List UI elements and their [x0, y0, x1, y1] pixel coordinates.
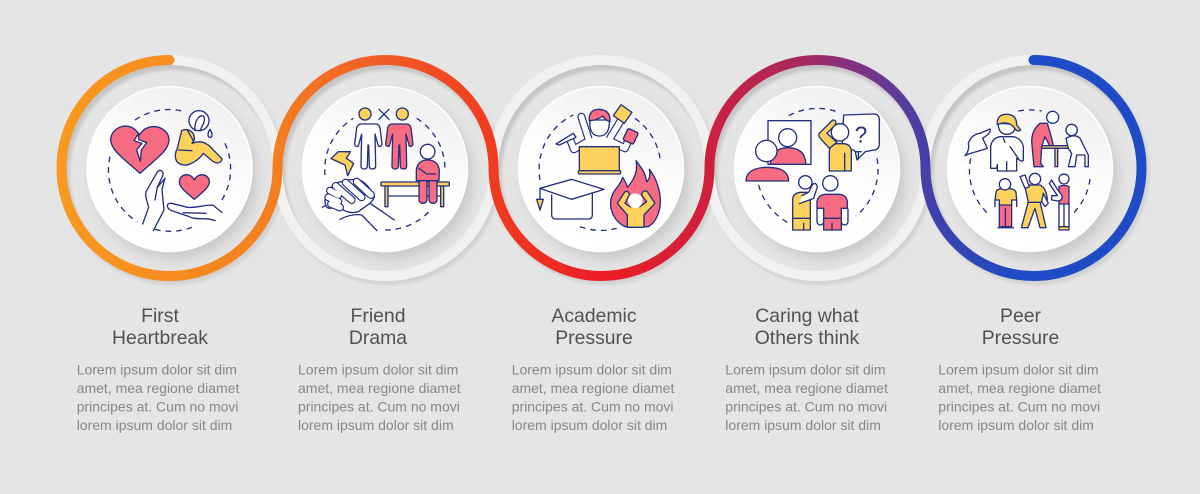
text block: first heartbreak: principes at. Cum no movi — [77, 398, 239, 414]
inner ring plates — [64, 62, 1140, 276]
text block: caring what others think: lorem ipsum dolor sit dim — [725, 417, 881, 433]
heading: First Heartbreak: First — [141, 305, 179, 327]
text block: peer pressure: lorem ipsum dolor sit dim — [938, 417, 1094, 433]
gradient ribbon linking the five rings — [61, 60, 1141, 276]
heading: Academic Pressure: Academic — [551, 305, 637, 327]
text block: caring what others think: Lorem ipsum dolor sit dim — [725, 362, 886, 378]
icon: friends apart, lonely teen, bolt, clasped hands — [322, 108, 449, 231]
text block: academic pressure: amet, mea regione diamet — [512, 380, 674, 396]
icon: broken heart, crying teen, caring hands — [108, 110, 231, 231]
text block: first heartbreak: lorem ipsum dolor sit dim — [77, 417, 232, 433]
panel: academic pressure — [518, 86, 689, 259]
text block: peer pressure: principes at. Cum no movi — [938, 398, 1100, 414]
icon: pointing hand, bullying and pressured teens — [965, 110, 1090, 230]
outer ring shadows — [60, 59, 1150, 285]
icon: multitasking student, graduation cap, flames — [537, 105, 661, 230]
heading: Academic Pressure: Pressure — [555, 327, 633, 349]
text block: peer pressure: Lorem ipsum dolor sit dim — [938, 362, 1099, 378]
heading: Caring what Others think: Others think — [755, 327, 860, 349]
text block: academic pressure: principes at. Cum no movi — [512, 398, 674, 414]
heading: Friend Drama: Friend — [351, 305, 405, 327]
text block: friend drama: lorem ipsum dolor sit dim — [298, 417, 454, 433]
heading: Peer Pressure: Peer — [1000, 305, 1042, 327]
heading: Caring what Others think: Caring what — [755, 305, 859, 327]
text block: friend drama: Lorem ipsum dolor sit dim — [298, 362, 458, 378]
text block: academic pressure: Lorem ipsum dolor sit dim — [512, 362, 672, 378]
heading: First Heartbreak: Heartbreak — [112, 327, 208, 349]
icon: mirror, question bubble, whispering friends — [746, 108, 879, 230]
panel: friend drama — [302, 86, 473, 259]
text block: friend drama: principes at. Cum no movi — [298, 398, 460, 414]
panel: first heartbreak — [87, 86, 257, 259]
text block: caring what others think: amet, mea regione diamet — [725, 380, 888, 396]
text block: peer pressure: amet, mea regione diamet — [938, 380, 1101, 396]
text block: friend drama: amet, mea regione diamet — [298, 380, 461, 396]
text block: caring what others think: principes at. Cum no movi — [725, 398, 887, 414]
text block: first heartbreak: Lorem ipsum dolor sit dim — [77, 362, 237, 378]
icon: mirror, question bubble, whispering friends: ? — [855, 121, 867, 147]
text block: first heartbreak: amet, mea regione diamet — [77, 380, 239, 396]
panel: caring what others think — [734, 86, 905, 259]
pale unfilled ring segments — [172, 60, 1030, 276]
panel: peer pressure — [948, 86, 1118, 259]
text block: academic pressure: lorem ipsum dolor sit dim — [512, 417, 667, 433]
heading: Friend Drama: Drama — [349, 327, 407, 349]
heading: Peer Pressure: Pressure — [982, 327, 1059, 349]
